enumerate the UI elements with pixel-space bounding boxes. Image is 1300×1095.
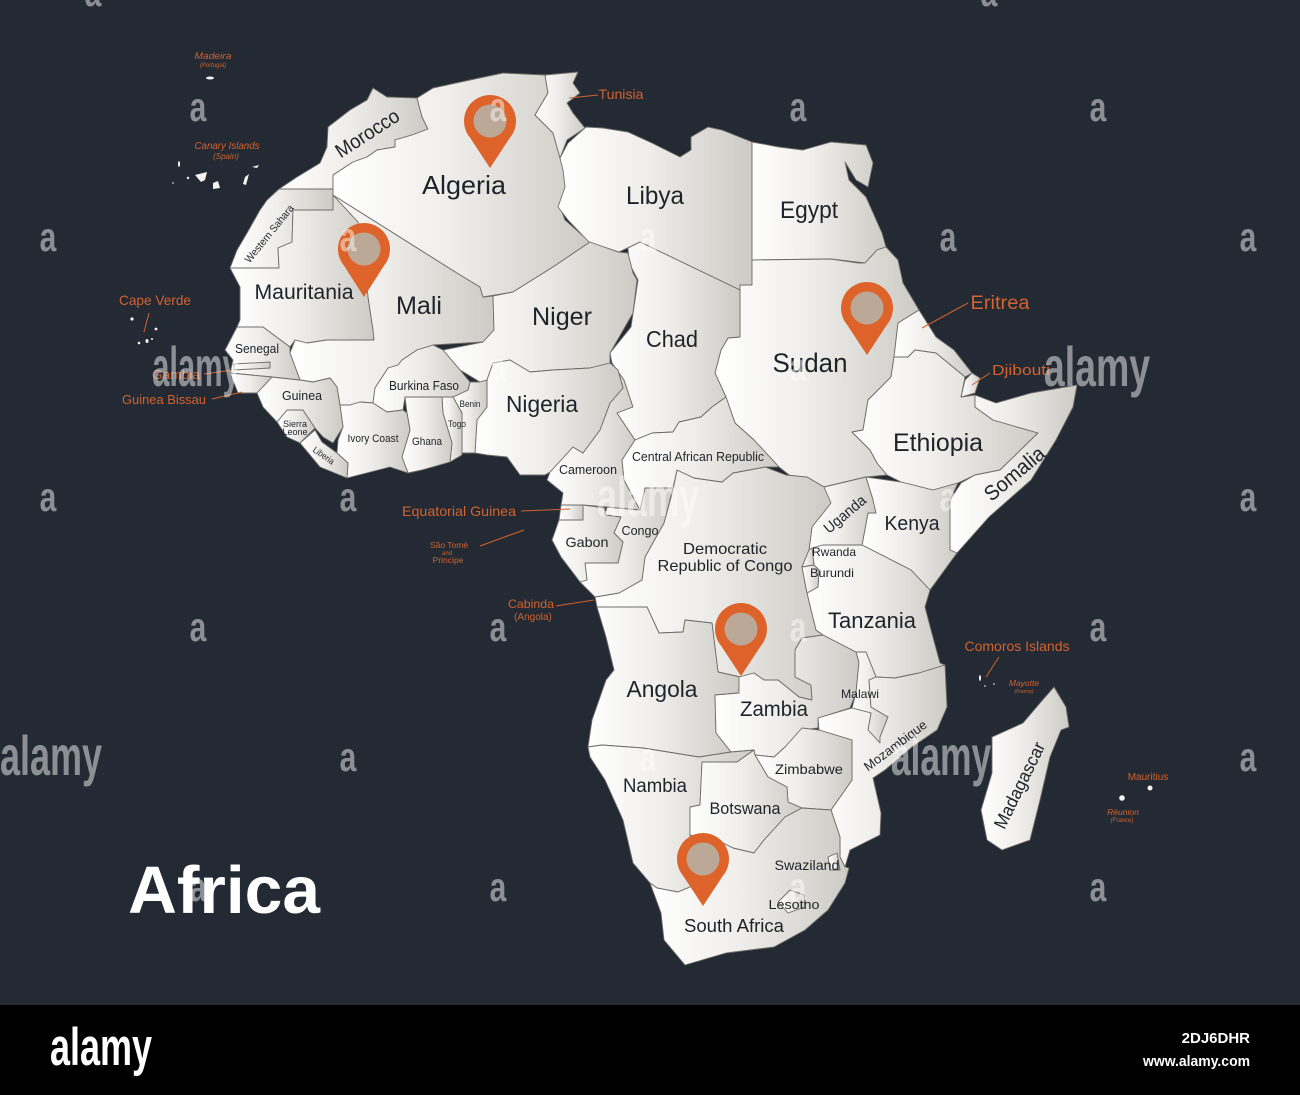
watermark pattern: a (340, 475, 357, 520)
country: Ethiopia (852, 350, 1038, 490)
label: Malawi: Malawi (841, 687, 879, 701)
label: Mozambique: Mozambique (861, 717, 930, 774)
watermark pattern: a (340, 215, 357, 260)
watermark pattern: alamy (0, 725, 102, 787)
label: Zambia: Zambia (740, 698, 808, 721)
callout: Djibouti (972, 362, 1050, 385)
callout: Réunion: Réunion (1107, 807, 1139, 817)
callout: Cabinda (508, 597, 594, 623)
label: Burundi: Burundi (810, 566, 854, 580)
watermark pattern: a (40, 215, 57, 260)
country: Cameroon (547, 363, 640, 510)
label: Tanzania: Tanzania (828, 608, 917, 633)
label: Liberia: Liberia (311, 445, 336, 467)
label: Algeria: Algeria (422, 170, 507, 200)
country: Algeria (333, 73, 590, 297)
label: Mauritania: Mauritania (254, 281, 354, 304)
country: Benin (453, 380, 487, 453)
country: Tanzania (807, 545, 945, 678)
callout: Mauritius: Mauritius (1128, 772, 1168, 783)
label: Burkina Faso: Burkina Faso (389, 378, 459, 393)
callout: Madeira (194, 51, 232, 69)
callout: Guinea Bissau: Guinea Bissau (122, 392, 206, 407)
watermark pattern: a (190, 865, 207, 910)
footer logo: alamy (50, 1017, 152, 1077)
country: Botswana (690, 750, 802, 853)
label: Somalia: Somalia (980, 442, 1050, 506)
watermark pattern: a (790, 605, 807, 650)
watermark pattern: a (490, 345, 507, 390)
label: Ghana: Ghana (412, 436, 443, 448)
watermark pattern: a (1090, 85, 1107, 130)
callout: Comoros Islands: Comoros Islands (964, 638, 1070, 654)
label: Botswana: Botswana (710, 799, 781, 818)
callout: Cape Verde (119, 292, 191, 332)
callout: Canary Islands: (Spain) (213, 152, 239, 161)
orange external labels (119, 51, 1168, 824)
callout: Cape Verde: Cape Verde (119, 292, 191, 308)
country: South Africa (650, 808, 849, 965)
watermark pattern: a (640, 215, 657, 260)
callout: Mayotte: (France) (1015, 689, 1034, 695)
callout: Djibouti: Djibouti (992, 362, 1050, 379)
label: Morocco: Morocco (332, 105, 404, 163)
country: Sierra Leone (277, 410, 315, 443)
country: Swaziland (828, 853, 840, 870)
country: Tunisia (535, 72, 585, 158)
country: Ivory Coast (337, 402, 410, 478)
watermark pattern: alamy (597, 466, 699, 528)
country: Gambia (234, 362, 270, 370)
callout: São Tomé and Principe: and (442, 551, 452, 557)
watermark pattern: alamy (152, 335, 240, 398)
label: Madagascar: Madagascar (990, 739, 1049, 832)
country: Western Sahara (230, 189, 333, 268)
label: Sierra Leone: Sierra (283, 419, 307, 429)
label: Egypt: Egypt (780, 197, 838, 224)
label: Ethiopia: Ethiopia (893, 429, 983, 457)
label: Sierra Leone: Leone (282, 427, 308, 437)
country: Senegal (225, 327, 300, 380)
label: Niger: Niger (532, 303, 592, 331)
country: Libya (558, 127, 752, 290)
label: Western Sahara: Western Sahara (243, 203, 297, 265)
watermark pattern: a (190, 605, 207, 650)
label: South Africa: South Africa (684, 916, 785, 936)
country: Zimbabwe (755, 728, 852, 810)
callout: Réunion (1107, 807, 1139, 824)
watermark pattern: a (790, 865, 807, 910)
watermark pattern: a (1240, 735, 1257, 780)
watermark pattern: a (490, 865, 507, 910)
callout: Réunion: (France) (1111, 818, 1133, 824)
country: Chad (610, 242, 740, 440)
watermark pattern: a (1240, 215, 1257, 260)
callout: Comoros Islands (964, 638, 1070, 677)
country: Niger (443, 242, 637, 382)
callout: Eritrea: Eritrea (970, 293, 1030, 314)
country: Togo (442, 397, 462, 462)
country: Democratic Republic of Congo (595, 467, 831, 700)
label: Benin: Benin (460, 399, 480, 409)
country: Lesotho (778, 890, 805, 913)
callout: Gambia (152, 367, 232, 382)
watermark pattern: a (940, 475, 957, 520)
label: Cameroon: Cameroon (559, 462, 617, 477)
callout: São Tomé and Principe (430, 530, 524, 565)
country: Gabon (552, 505, 623, 582)
callout: Madeira: Madeira (194, 51, 232, 62)
country: Eritrea (894, 310, 972, 377)
country: Angola (588, 607, 740, 757)
label: Nigeria: Nigeria (506, 391, 578, 417)
callout: Eritrea (922, 293, 1030, 328)
label: Rwanda: Rwanda (812, 545, 856, 559)
label: Sudan: Sudan (772, 348, 848, 378)
watermark pattern: alamy (891, 725, 991, 787)
title: Africa (128, 853, 321, 928)
callout: São Tomé and Principe: São Tomé (430, 540, 468, 550)
callout: Tunisia: Tunisia (598, 86, 644, 102)
map of Africa (225, 72, 1077, 965)
label: Chad: Chad (646, 326, 698, 352)
country: Mali (290, 195, 494, 405)
country: Djibouti (961, 373, 980, 397)
label: Congo: Congo (622, 523, 658, 538)
country: Congo (580, 488, 673, 597)
country: Namibia (588, 745, 754, 892)
country: Central African Republic (622, 397, 779, 510)
label: Zimbabwe: Zimbabwe (775, 761, 843, 777)
country: Rwanda (802, 548, 814, 567)
callout: Gambia: Gambia (152, 367, 201, 382)
callout: Mayotte (1009, 678, 1039, 695)
callout: Cabinda: (Angola) (514, 612, 552, 623)
label: Democratic Republic of Congo: Republic of Congo (658, 558, 793, 575)
country: Liberia (300, 430, 348, 478)
watermark pattern: a (40, 475, 57, 520)
watermark pattern: a (940, 215, 957, 260)
country: Uganda (809, 477, 876, 550)
watermark pattern: a (490, 85, 507, 130)
watermark pattern: a (190, 85, 207, 130)
pin: Mauritania (338, 223, 390, 297)
label: Gabon: Gabon (566, 534, 608, 550)
country: Egypt (752, 142, 886, 263)
country: Mauritania (230, 195, 374, 347)
callout: Canary Islands (194, 140, 260, 161)
callout: Tunisia (569, 86, 644, 102)
country labels (235, 105, 1050, 936)
country: Madagascar (981, 687, 1069, 850)
country: Guinea Bissau (230, 373, 272, 393)
callout: Madeira: (Portugal) (200, 63, 226, 69)
callout: São Tomé and Principe: Principe (433, 555, 464, 565)
pin: South Africa (677, 833, 729, 906)
country: Guinea (257, 377, 343, 443)
label: Uganda: Uganda (820, 492, 870, 537)
country: Malawi (852, 652, 888, 743)
callout: Mayotte: Mayotte (1009, 678, 1039, 688)
watermark pattern: a (640, 735, 657, 780)
watermark pattern: a (790, 85, 807, 130)
country: Mozambique (818, 665, 947, 867)
label: Kenya: Kenya (884, 513, 940, 535)
label: Senegal: Senegal (235, 341, 279, 356)
watermark pattern: a (790, 345, 807, 390)
country: Sudan (715, 247, 919, 487)
label: Ivory Coast: Ivory Coast (348, 433, 398, 445)
watermark pattern: a (1090, 865, 1107, 910)
country: Equatorial Guinea (559, 505, 583, 520)
label: Swaziland: Swaziland (774, 857, 840, 873)
footer url: www.alamy.com (1142, 1053, 1250, 1070)
callout: Equatorial Guinea: Equatorial Guinea (402, 503, 516, 519)
label: Nambia: Nambia (623, 776, 687, 797)
country: Nigeria (475, 360, 623, 475)
label: Libya: Libya (626, 182, 684, 210)
label: Lesotho: Lesotho (768, 897, 820, 912)
label: Mali: Mali (396, 292, 442, 320)
watermark pattern: a (490, 605, 507, 650)
label: Angola: Angola (626, 676, 698, 702)
label: Democratic Republic of Congo: Democratic (683, 541, 767, 558)
watermark pattern: a (1090, 605, 1107, 650)
small islands (130, 76, 1152, 801)
country: Burundi (802, 565, 819, 593)
country: Kenya (862, 477, 958, 590)
country: Burkina Faso (373, 345, 470, 412)
callout: Cabinda: Cabinda (508, 597, 554, 611)
label: Guinea: Guinea (282, 388, 323, 403)
pin: Sudan (841, 282, 893, 355)
watermark pattern: a (1240, 475, 1257, 520)
country: Somalia (950, 385, 1077, 553)
country: Zambia (715, 635, 859, 757)
label: Togo: Togo (448, 419, 466, 429)
watermark pattern: alamy (1044, 337, 1151, 399)
watermark pattern: a (340, 735, 357, 780)
country: Morocco (279, 88, 428, 189)
footer image id: 2DJ6DHR (1182, 1030, 1250, 1047)
country: Ghana (402, 397, 452, 473)
callout: Canary Islands: Canary Islands (194, 140, 260, 152)
label: Central African Republic: Central African Republic (632, 449, 764, 464)
pin: Algeria (464, 95, 516, 168)
pin: Democratic Republic of Congo (715, 603, 767, 676)
